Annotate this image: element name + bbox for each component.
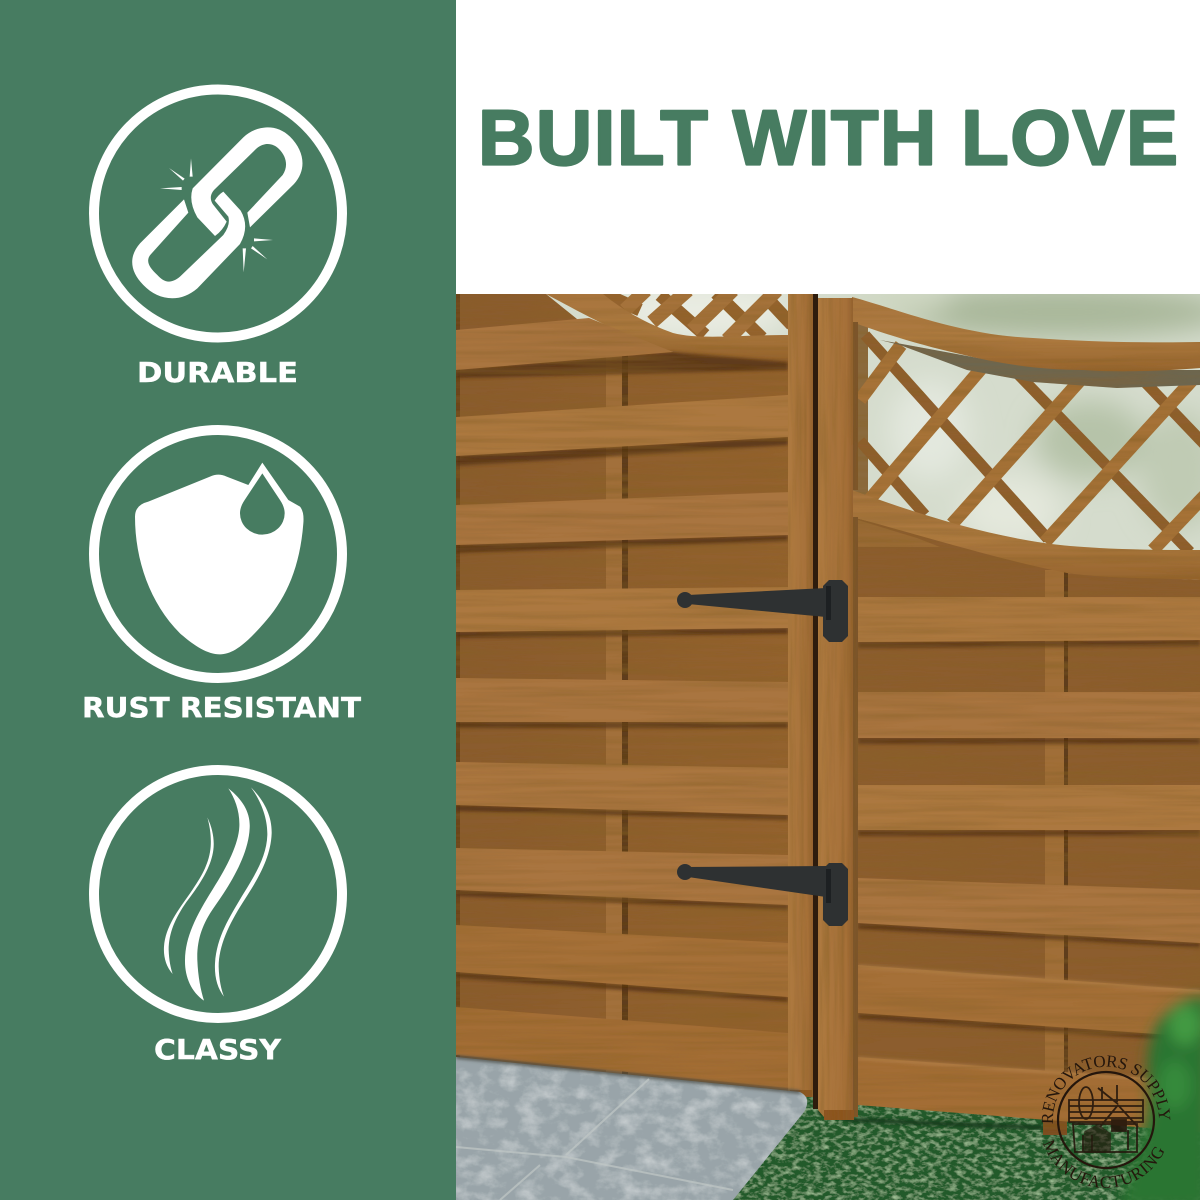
blurred bush xyxy=(1120,997,1200,1200)
label: classy: CLASSY xyxy=(154,1034,282,1066)
left door lattice xyxy=(603,294,788,337)
right door lower arch rail xyxy=(852,490,1200,580)
grass xyxy=(733,1090,1200,1200)
icon: broken chain link in circle xyxy=(94,90,342,338)
bottom hinge xyxy=(677,863,848,926)
gate woodwork xyxy=(456,290,1200,1135)
feature: rust resistant xyxy=(82,430,361,724)
title: BUILT WITH LOVE xyxy=(478,94,1178,182)
logo: Renovators Supply Manufacturing stamp: MANUFACTURING xyxy=(1042,1138,1164,1188)
left door recessed panels xyxy=(456,294,788,1092)
logo: Renovators Supply Manufacturing stamp: RENOVATORS SUPPLY xyxy=(1042,1055,1170,1124)
logo: Renovators Supply Manufacturing stamp xyxy=(1042,1055,1170,1188)
icon: flowing waves in circle xyxy=(94,770,342,1018)
icon: shield with water drop in circle xyxy=(94,430,342,678)
blurred garden background xyxy=(546,294,1200,580)
right door recessed panels xyxy=(852,517,1200,1135)
left door arch rail xyxy=(546,294,789,359)
feature: classy xyxy=(94,770,342,1066)
right door horizontal boards xyxy=(858,597,1200,1132)
paving stones xyxy=(456,1050,816,1200)
top hinge xyxy=(677,580,848,642)
photo: wooden gate xyxy=(456,294,1200,1200)
gate posts xyxy=(788,294,858,1120)
label: rust resistant: RUST RESISTANT xyxy=(82,692,361,724)
right door lattice xyxy=(852,322,1200,552)
shadow under upper arch xyxy=(880,340,1200,388)
panel: green sidebar xyxy=(0,0,456,1200)
left door horizontal boards xyxy=(456,318,788,1088)
label: durable: DURABLE xyxy=(137,357,298,389)
feature: durable xyxy=(94,90,342,389)
upper arch rail xyxy=(852,297,1200,371)
